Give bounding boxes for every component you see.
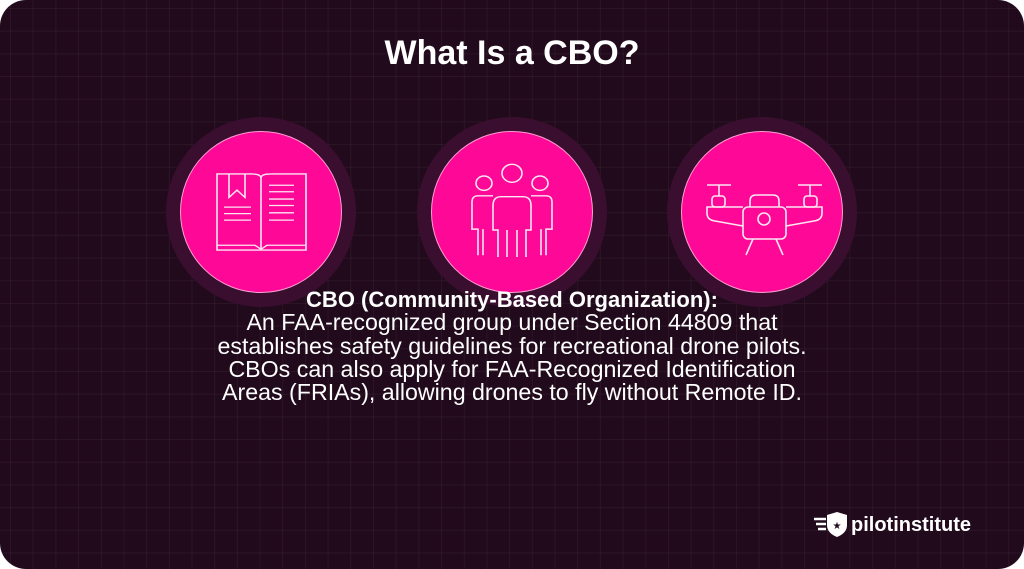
text block: definition: Areas (FRIAs), allowing drones to fly without Remote ID.	[222, 379, 802, 405]
text block: definition: CBOs can also apply for FAA-Recognized Identification	[228, 356, 796, 382]
logo: pilotinstitute: ★	[833, 521, 842, 532]
icon: book	[166, 117, 356, 307]
icon: drone	[667, 117, 857, 307]
text block: definition	[217, 287, 807, 405]
text block: definition: An FAA-recognized group under Section 44809 that	[246, 309, 778, 335]
logo: pilotinstitute	[814, 512, 971, 537]
logo: pilotinstitute: pilotinstitute	[851, 514, 971, 536]
text block: definition: establishes safety guidelines for recreational drone pilots.	[217, 333, 807, 359]
title: What Is a CBO?	[384, 34, 640, 72]
icon: people	[417, 117, 607, 307]
text block: definition: CBO (Community-Based Organization):	[306, 287, 718, 312]
